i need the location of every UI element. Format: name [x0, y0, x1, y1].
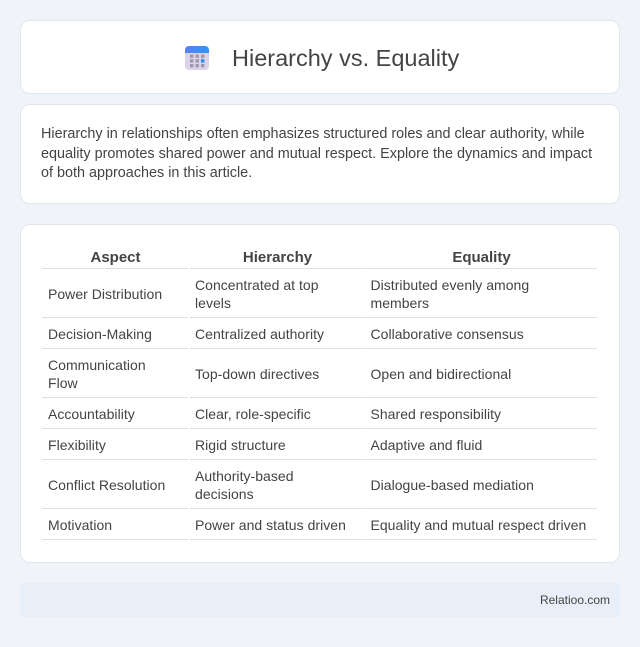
- row: Flexibility: Flexibility: [48, 437, 106, 453]
- icon: calendar: [185, 46, 209, 70]
- panel: comparison table card: [20, 224, 620, 563]
- intro text: [41, 126, 592, 181]
- panel: intro card: [20, 104, 620, 204]
- panel: title card: [20, 20, 620, 94]
- comparison table: Adaptive and fluid: [370, 437, 482, 453]
- footer text: Relatioo.com: [540, 593, 610, 607]
- comparison table: members: [370, 295, 429, 311]
- comparison table: Shared responsibility: [370, 406, 501, 422]
- comparison table: Equality and mutual respect driven: [370, 517, 586, 533]
- row: Conflict Resolution: Conflict Resolution: [48, 477, 165, 493]
- comparison table: Collaborative consensus: [370, 326, 524, 342]
- row: Communication Flow: Flow: [48, 375, 78, 391]
- comparison table: decisions: [195, 486, 254, 502]
- footer bar: [20, 583, 620, 617]
- row: Decision-Making: Decision-Making: [48, 326, 152, 342]
- comparison table: levels: [195, 295, 231, 311]
- intro text: Hierarchy in relationships often emphasizes structured roles and clear authority, while: [41, 126, 585, 142]
- column heading: Aspect: Aspect: [90, 249, 141, 266]
- comparison table: Power and status driven: [195, 517, 346, 533]
- column heading: Hierarchy: Hierarchy: [243, 249, 312, 266]
- comparison table: Top-down directives: [195, 366, 319, 382]
- comparison table: Concentrated at top: [195, 277, 319, 293]
- row: Power Distribution: Power Distribution: [48, 286, 162, 302]
- row: Motivation: Motivation: [48, 517, 112, 533]
- row: Accountability: Accountability: [48, 406, 135, 422]
- comparison table: Clear, role-specific: [195, 406, 311, 422]
- comparison table: Open and bidirectional: [370, 366, 511, 382]
- row: Communication Flow: [48, 357, 146, 391]
- intro text: of both approaches in this article.: [41, 165, 252, 181]
- comparison table: Centralized authority: [195, 326, 324, 342]
- comparison table: Authority-based: [195, 468, 294, 484]
- intro text: equality promotes shared power and mutual respect. Explore the dynamics and impact: [41, 146, 592, 162]
- comparison table: Distributed evenly among: [370, 277, 529, 293]
- row: Communication Flow: Communication: [48, 357, 146, 373]
- comparison table: Rigid structure: [195, 437, 286, 453]
- column heading: Equality: Equality: [452, 249, 511, 266]
- comparison table: Dialogue-based mediation: [370, 477, 534, 493]
- title: Hierarchy vs. Equality: [232, 45, 459, 71]
- comparison table: [42, 249, 597, 540]
